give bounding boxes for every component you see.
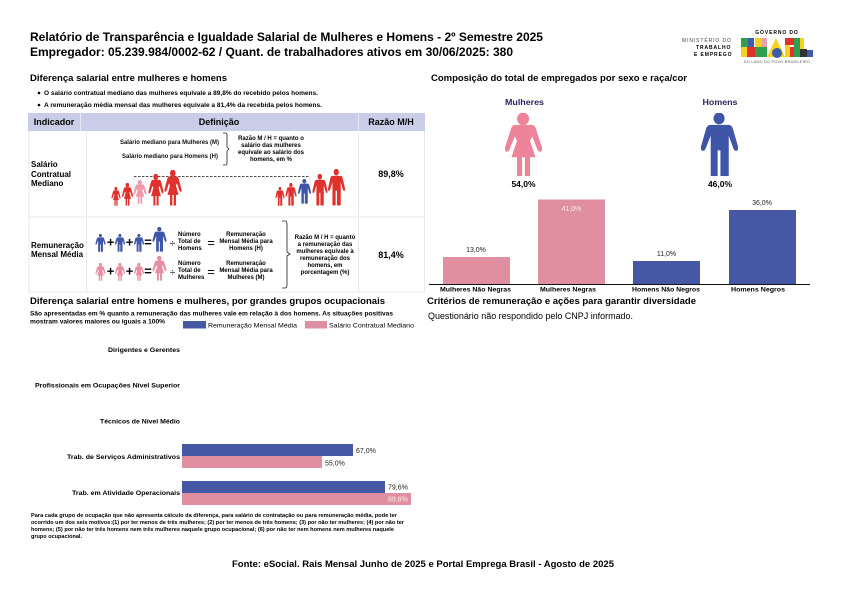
bar: homens não negros <box>632 251 700 294</box>
row: remuneração mensal média: ÷ <box>170 268 176 278</box>
bars: serviços administrativos <box>182 444 376 468</box>
table: indicadores <box>28 113 425 292</box>
bars: atividade operacional: 89,8% <box>388 496 408 504</box>
bar: mulheres não negras: 13,0% <box>466 247 486 254</box>
row: salário contratual mediano: equivale ao salário dos <box>238 150 305 156</box>
text: explanation: mostram valores maiores ou iguais a 100% <box>30 318 165 326</box>
row: salário contratual mediano: homens, em % <box>250 157 293 163</box>
bullet list <box>38 90 322 109</box>
footnote: grupo ocupacional. <box>31 534 82 540</box>
icon: men formula <box>95 227 167 252</box>
bars: atividade operacional <box>182 481 411 505</box>
row: remuneração mensal média: = <box>207 264 215 279</box>
category labels: Técnicos de Nível Médio <box>100 418 180 426</box>
title: Relatório de Transparência e Igualdade Salarial de Mulheres e Homens - 2º Semestre 2025 <box>30 30 543 44</box>
pictogram: homens: Homens <box>702 97 738 107</box>
row: remuneração mensal média: Mensal Média para <box>219 268 273 274</box>
bars: atividade operacional: 79,6% <box>388 484 408 492</box>
column chart: sexo e raça/cor <box>429 200 810 294</box>
title: Empregador: 05.239.984/0002-62 / Quant. de trabalhadores ativos em 30/06/2025: 380 <box>30 45 513 59</box>
category labels: Trab. de Serviços Administrativos <box>67 454 180 461</box>
pictogram: mulheres: 54,0% <box>511 179 536 189</box>
heading: grupos ocupacionais: Diferença salarial entre homens e mulheres, por grandes grupos ocupacionais <box>30 296 385 307</box>
source: Fonte: eSocial. Rais Mensal Junho de 2025 e Portal Emprega Brasil - Agosto de 2025 <box>232 559 614 569</box>
row: remuneração mensal média: Homens (H) <box>229 246 263 252</box>
row: salário contratual mediano: Contratual <box>31 170 71 179</box>
row: remuneração mensal média: = <box>207 235 215 250</box>
row: remuneração mensal média: a remuneração das <box>298 242 353 248</box>
row: salário contratual mediano <box>31 133 404 206</box>
pictogram: homens <box>701 97 738 189</box>
row: remuneração mensal média: Razão M / H = quanto <box>295 235 356 241</box>
logo: ministério do trabalho e emprego: TRABALHO <box>696 45 731 51</box>
row: salário contratual mediano: Salário mediano para Mulheres (M) <box>120 140 219 146</box>
table header: Definição <box>199 117 240 127</box>
heading: critérios: Critérios de remuneração e ações para garantir diversidade <box>427 296 696 307</box>
row: remuneração mensal média: Número <box>178 232 201 238</box>
text: explanation <box>30 310 394 326</box>
bar: homens negros <box>729 200 796 294</box>
row: remuneração mensal média: + <box>126 264 134 278</box>
footnote <box>31 513 405 540</box>
row: salário contratual mediano: Salário <box>31 160 58 169</box>
row: remuneração mensal média: 81,4% <box>378 250 404 260</box>
logo: governo do Brasil: GOVERNO DO <box>755 30 799 36</box>
table header <box>28 113 425 131</box>
pictogram: mulheres <box>505 97 544 189</box>
row: remuneração mensal média: Remuneração <box>31 241 84 250</box>
heading: diferença salarial: Diferença salarial entre mulheres e homens <box>30 73 227 84</box>
row: remuneração mensal média: = <box>144 264 152 278</box>
category labels <box>35 347 180 497</box>
row: remuneração mensal média: Mensal Média para <box>219 239 273 245</box>
bar: mulheres não negras: Mulheres Não Negras <box>440 286 511 294</box>
bar: mulheres negras: Mulheres Negras <box>540 286 596 294</box>
row: remuneração mensal média: Total de <box>178 239 201 245</box>
heading: composição: Composição do total de empregados por sexo e raça/cor <box>431 73 687 84</box>
bars: serviços administrativos: 55,0% <box>325 460 345 468</box>
row: remuneração mensal média: Homens <box>178 246 202 252</box>
bars: serviços administrativos: 67,0% <box>356 448 376 455</box>
row: salário contratual mediano: salário das mulheres <box>241 143 302 149</box>
row: remuneração mensal média: Número <box>178 261 201 267</box>
row: remuneração mensal média: Remuneração <box>226 261 266 267</box>
bullet list: O salário contratual mediano das mulheres equivale a 89,8% do recebido pelos homens. <box>44 90 318 97</box>
row: remuneração mensal média: Mulheres (M) <box>227 275 265 281</box>
logo: governo do Brasil: DO LADO DO POVO BRASILEIRO <box>744 60 810 64</box>
row: remuneração mensal média: + <box>126 234 134 250</box>
row: remuneração mensal média <box>31 221 404 288</box>
icon: women formula <box>95 256 167 281</box>
row: remuneração mensal média: remuneração dos <box>300 256 351 262</box>
pictogram: mulheres: Mulheres <box>505 97 544 107</box>
legend <box>183 321 414 330</box>
icon: women group <box>111 170 182 206</box>
row: remuneração mensal média: homens, em <box>307 263 343 269</box>
bar: mulheres negras <box>538 200 605 294</box>
legend: Salário Contratual Mediano <box>329 322 414 330</box>
bar: mulheres negras: 41,0% <box>562 206 581 213</box>
icon: men group <box>275 169 345 206</box>
bar: mulheres não negras <box>440 247 511 294</box>
row: remuneração mensal média: porcentagem (%) <box>301 270 349 276</box>
logo: ministério do trabalho e emprego: MINISTÉRIO DO <box>682 37 732 44</box>
row: remuneração mensal média: Mulheres <box>178 275 205 281</box>
row: salário contratual mediano: Razão M / H = quanto o <box>238 136 304 142</box>
legend: Remuneração Mensal Média <box>208 322 297 330</box>
pictogram: homens: 46,0% <box>708 179 732 189</box>
row: remuneração mensal média: ÷ <box>170 238 176 250</box>
bar chart: grupos ocupacionais <box>35 347 411 505</box>
bar: homens negros: Homens Negros <box>731 286 785 294</box>
title <box>30 30 543 59</box>
row: salário contratual mediano: 89,8% <box>378 169 404 179</box>
bar: homens não negros: Homens Não Negros <box>632 286 700 294</box>
row: remuneração mensal média: + <box>107 264 115 278</box>
row: remuneração mensal média: Total de <box>178 268 201 274</box>
logo: ministério do trabalho e emprego <box>682 37 732 58</box>
row: remuneração mensal média: Remuneração <box>226 232 266 238</box>
category labels: Dirigentes e Gerentes <box>108 347 180 354</box>
row: salário contratual mediano: Mediano <box>31 179 64 188</box>
footnote: ocorrido um dos seis motivos:(1) por ter menos de três mulheres; (2) por ter menos de três homens; (3) por não ter mulheres; (4) por não ter <box>31 520 405 526</box>
bullet list: A remuneração média mensal das mulheres equivale a 81,4% da recebida pelos homens. <box>44 102 322 109</box>
logo: governo do Brasil <box>741 30 813 64</box>
row: remuneração mensal média: mulheres equivale à <box>296 249 354 255</box>
bar: homens não negros: 11,0% <box>657 251 676 258</box>
category labels: Profissionais em Ocupações Nível Superior <box>35 382 180 390</box>
table header: Indicador <box>34 117 75 127</box>
row: salário contratual mediano: Salário mediano para Homens (H) <box>122 154 218 160</box>
logo: ministério do trabalho e emprego: E EMPREGO <box>694 52 732 58</box>
table header: Razão M/H <box>368 117 414 127</box>
row: remuneração mensal média: + <box>107 234 115 250</box>
footnote: Para cada grupo de ocupação que não apresenta cálculo da diferença, para salário de contratação ou para remuneração média, pode ter <box>31 513 398 519</box>
row: remuneração mensal média: = <box>144 234 152 250</box>
text: explanation: São apresentadas em % quanto a remuneração das mulheres vale em relação à dos homens. As situações positivas <box>30 310 394 318</box>
bar: homens negros: 36,0% <box>752 200 772 207</box>
footnote: homens; (5) por não ter três homens nem três mulheres naquele grupo ocupacional; (6) por não ter nem homens nem mulheres naquele <box>31 527 394 533</box>
text: questionário: Questionário não respondido pelo CNPJ informado. <box>428 311 633 321</box>
category labels: Trab. em Atividade Operacionais <box>72 490 180 497</box>
row: remuneração mensal média: Mensal Média <box>31 250 84 259</box>
